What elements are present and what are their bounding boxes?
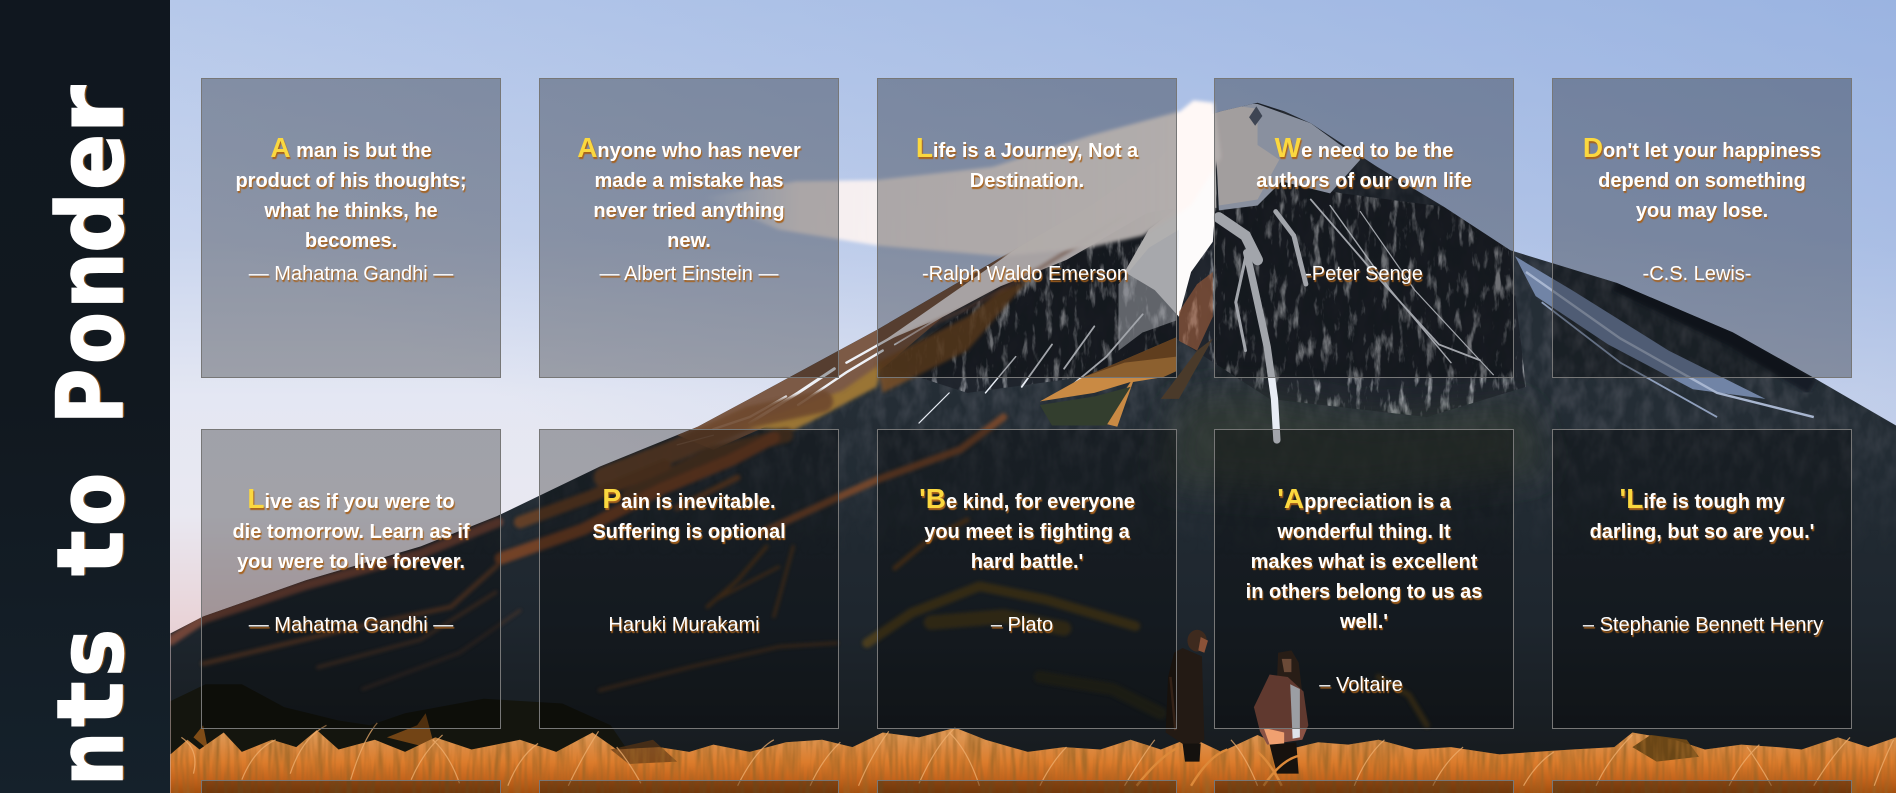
quote text: never tried anything — [593, 200, 785, 222]
dark rock mass — [885, 181, 1526, 417]
quote text — [235, 132, 467, 252]
attribution: -Ralph Waldo Emerson — [922, 263, 1128, 285]
panel: third row card 3 — [877, 780, 1177, 793]
white snow below summit — [1126, 164, 1216, 317]
panel: quote card Gandhi thoughts — [201, 78, 501, 378]
quote text: new. — [667, 230, 711, 252]
quote text: Suffering is optional — [592, 521, 786, 543]
panel: quote card Lewis — [1552, 78, 1852, 378]
panel: quote card Gandhi live — [201, 429, 501, 729]
panel: third row card 2 — [539, 780, 839, 793]
sidebar title — [39, 85, 144, 786]
sidebar title: o — [39, 312, 144, 364]
quote text — [919, 483, 1136, 573]
olive lower flank — [1161, 393, 1548, 496]
quote text: 'Appreciation is a — [1277, 483, 1451, 514]
panel: quote card Einstein — [539, 78, 839, 378]
snow flecks on rock — [916, 184, 1526, 416]
quote text: depend on something — [1598, 170, 1806, 192]
quote text: you were to live forever. — [237, 551, 465, 573]
sidebar title: o — [39, 473, 144, 526]
cloud plume — [703, 100, 1221, 256]
quote text — [577, 132, 802, 252]
panel: third row card 1 — [201, 780, 501, 793]
quote text: what he thinks, he — [264, 200, 438, 222]
quote text: We need to be the — [1275, 132, 1453, 163]
quote text — [1256, 132, 1472, 192]
panel: third row card 5 — [1552, 780, 1852, 793]
quote text: Life is a Journey, Not a — [916, 132, 1138, 163]
quote text: Anyone who has never — [577, 132, 801, 163]
orange rock near summit — [1179, 272, 1213, 351]
quote text — [592, 483, 786, 544]
quote text: authors of our own life — [1256, 170, 1472, 192]
quote text: wonderful thing. It — [1277, 521, 1451, 543]
sidebar title: t — [39, 530, 144, 576]
panel: quote card Plato — [877, 429, 1177, 729]
quote text: in others belong to us as — [1246, 581, 1482, 603]
green slope — [1040, 387, 1131, 426]
person: man — [1166, 630, 1208, 762]
quote text — [1583, 132, 1822, 224]
sidebar title: n — [39, 732, 144, 786]
quote text — [1246, 483, 1483, 633]
attribution: — Mahatma Gandhi — — [249, 614, 453, 636]
quote text: 'Life is tough my — [1620, 483, 1784, 514]
quote text: Pain is inevitable. — [602, 483, 776, 514]
person: woman — [1254, 650, 1308, 774]
brown flecked slope — [677, 247, 1019, 450]
bushes — [170, 684, 631, 762]
sidebar title: P — [39, 369, 144, 424]
panel: quote card Senge — [1214, 78, 1514, 378]
attribution: -C.S. Lewis- — [1643, 263, 1751, 285]
attribution: – Plato — [991, 614, 1053, 636]
quote text — [232, 483, 472, 574]
panel: quote card Henry — [1552, 429, 1852, 729]
quote text: becomes. — [305, 230, 397, 252]
attribution: -Peter Senge — [1305, 263, 1423, 285]
right shoulder — [1515, 256, 1765, 399]
pale snow field — [883, 194, 1216, 342]
sidebar title: s — [39, 629, 144, 677]
panel: third row card 4 — [1214, 780, 1514, 793]
quote text: A man is but the — [270, 132, 432, 163]
quote text: Destination. — [970, 170, 1084, 192]
attribution: – Voltaire — [1319, 674, 1403, 696]
lit slopes row two — [170, 401, 1427, 725]
attribution: — Mahatma Gandhi — — [249, 263, 453, 285]
panel: quote card Murakami — [539, 429, 839, 729]
quote text: makes what is excellent — [1251, 551, 1477, 573]
ochre lit slope — [748, 366, 880, 432]
panel: quote card Voltaire — [1214, 429, 1514, 729]
quote text — [916, 132, 1140, 192]
quote text: you meet is fighting a — [924, 521, 1130, 543]
quote text: product of his thoughts; — [235, 170, 467, 192]
snow streaks — [919, 199, 1493, 440]
sidebar title: d — [39, 192, 144, 253]
sidebar title: e — [39, 134, 144, 190]
attribution: – Stephanie Bennett Henry — [1583, 614, 1823, 636]
sidebar — [0, 0, 170, 793]
quote text: Don't let your happiness — [1583, 132, 1821, 163]
quote text — [1590, 483, 1815, 544]
quote text: hard battle.' — [971, 551, 1083, 573]
quote text: Live as if you were to — [247, 483, 455, 514]
grass — [170, 728, 1896, 793]
haze at summit — [1214, 103, 1360, 210]
quote text: you may lose. — [1636, 200, 1768, 222]
quote text: made a mistake has — [594, 170, 784, 192]
sidebar title: t — [39, 681, 144, 727]
panel: quote card Emerson — [877, 78, 1177, 378]
snow patches on upper-left slope — [676, 317, 942, 446]
sidebar title: n — [39, 252, 144, 309]
attribution: — Albert Einstein — — [600, 263, 778, 285]
sunlit ridge — [1040, 337, 1177, 427]
quote text: well.' — [1340, 611, 1388, 633]
quote text: die tomorrow. Learn as if — [232, 521, 470, 543]
quote text: 'Be kind, for everyone — [919, 483, 1135, 514]
sidebar title: r — [39, 86, 144, 134]
rock texture — [538, 110, 1896, 500]
quote text: darling, but so are you.' — [1590, 521, 1814, 543]
attribution: Haruki Murakami — [608, 614, 760, 636]
